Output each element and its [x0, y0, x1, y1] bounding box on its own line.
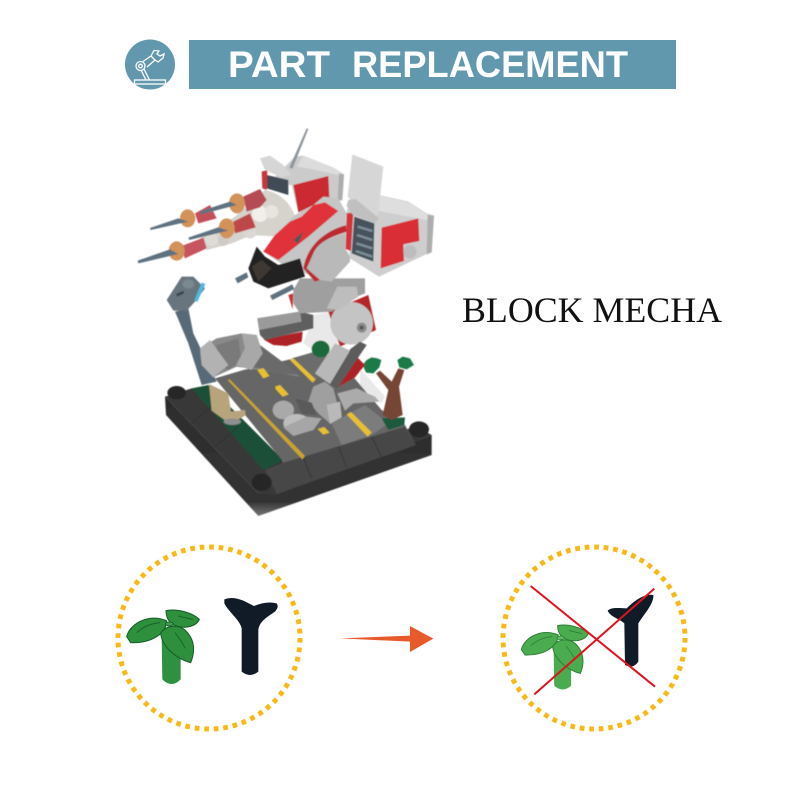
smoke clusters: [200, 190, 295, 250]
rear gripper foot and back plate: [200, 333, 300, 377]
front toes: [273, 398, 322, 436]
panel: parts after: [503, 547, 685, 729]
hull: [248, 197, 350, 288]
icon: tilted black Y piece: [608, 595, 653, 667]
front shoulder and hull: [235, 154, 434, 300]
title banner: PART: [228, 44, 330, 85]
title banner: REPLACEMENT: [352, 44, 628, 85]
arrow: [340, 626, 433, 652]
road markings: [228, 379, 372, 459]
caption: block mecha: BLOCK MECHA: [462, 290, 722, 330]
sign block: [209, 384, 246, 425]
title banner: [189, 40, 676, 89]
spikes: [138, 202, 237, 263]
icon: light green plant piece: [521, 625, 588, 689]
rear shoulder: [260, 128, 344, 212]
guns: [235, 272, 294, 300]
tree, road marks and front leg: [257, 295, 414, 424]
shin: [315, 342, 367, 388]
corner studs: [167, 386, 429, 491]
ankle blocks: [308, 382, 342, 423]
knee joint: [328, 295, 376, 347]
diorama base: [165, 357, 432, 516]
icon: black Y piece: [224, 598, 278, 675]
rear road plate and stud: [290, 341, 337, 383]
red cross: [531, 586, 655, 694]
missile pods: [138, 189, 295, 263]
panel: parts before: [118, 547, 300, 729]
orange rings: [169, 193, 245, 261]
soft ground shadow: [303, 312, 385, 403]
rear hip and lower hull: [288, 278, 365, 313]
tree: [363, 357, 414, 420]
red tubes: [180, 189, 267, 258]
rear thigh: [257, 312, 313, 346]
lamp post: [167, 277, 217, 385]
yellow dashes: [257, 368, 269, 378]
tile seams: [192, 403, 382, 478]
icon: green plant piece: [127, 610, 199, 684]
icon: robot arm badge: [125, 40, 175, 90]
illustration: block mecha model: [138, 128, 434, 516]
front shoulder block: [345, 154, 434, 277]
front foot claw: [337, 388, 379, 411]
